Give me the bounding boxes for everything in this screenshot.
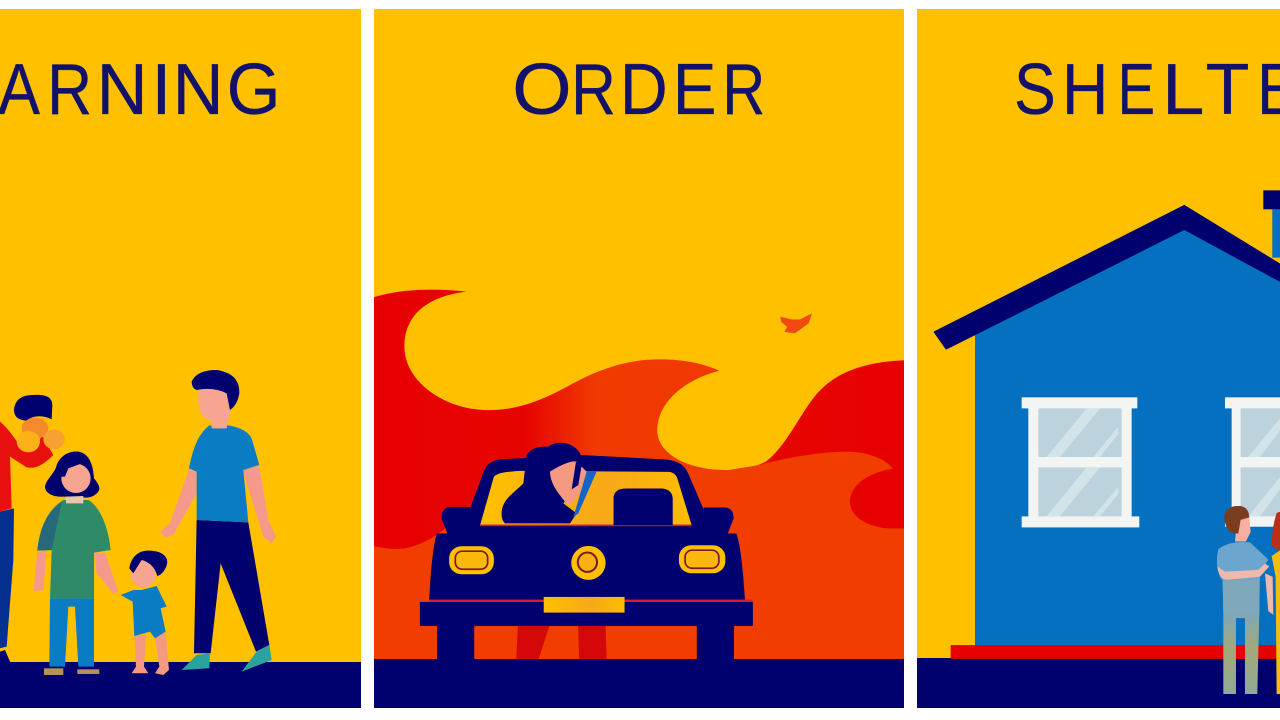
- window left: [1022, 397, 1139, 527]
- car legs: red figure behind car: [516, 625, 607, 659]
- car seat: [614, 488, 673, 525]
- heading: ORDER: D: [620, 50, 668, 130]
- ground: shelter panel: [917, 658, 1280, 708]
- heading: ORDER: O: [512, 50, 572, 130]
- figure: toddler in blue: [121, 551, 169, 675]
- heading: SHELTER: L: [1162, 50, 1204, 130]
- figure: parent in red at left: [0, 395, 65, 670]
- panel: shelter: [917, 9, 1280, 708]
- rear window: [480, 471, 692, 525]
- heading: SHELTER: H: [1062, 50, 1108, 130]
- tail light right: [679, 545, 725, 573]
- fire: back wave: [374, 290, 904, 549]
- license plate: [544, 597, 625, 613]
- fire: front wave: [370, 452, 907, 660]
- family of four walking: [0, 370, 276, 675]
- window right: [1225, 397, 1280, 527]
- car emblem: [571, 546, 606, 580]
- chimney: [1263, 190, 1280, 258]
- bird silhouette: [780, 313, 812, 333]
- roof: [933, 205, 1280, 350]
- heading: ORDER: E: [673, 50, 716, 130]
- figure: woman at house edge: [1265, 511, 1280, 694]
- ground: warning panel: [0, 662, 361, 708]
- heading: SHELTER: S: [1014, 50, 1056, 130]
- house: [933, 190, 1280, 659]
- figure: man in blue shirt: [160, 370, 276, 672]
- car rear view: [420, 455, 753, 662]
- tail light left: [449, 546, 494, 574]
- heading: WARNING: R: [47, 50, 92, 130]
- heading: ORDER: R: [571, 50, 616, 130]
- person leaning in car: [502, 443, 597, 523]
- house wall: [975, 221, 1280, 646]
- heading: WARNING: N: [97, 50, 148, 130]
- panel: warning: [0, 9, 361, 708]
- figure: man at house: [1217, 506, 1269, 694]
- front step: [951, 645, 1280, 659]
- ground: order panel: [374, 659, 904, 708]
- heading: SHELTER: E: [1118, 50, 1155, 130]
- heading: WARNING: I: [151, 50, 171, 130]
- panel: order: [370, 9, 907, 708]
- heading: WARNING: N: [173, 50, 224, 130]
- heading: WARNING: G: [227, 50, 281, 130]
- heading: ORDER: R: [722, 50, 765, 130]
- figure: girl in green: [33, 452, 118, 675]
- heading: SHELTER: T: [1206, 50, 1249, 130]
